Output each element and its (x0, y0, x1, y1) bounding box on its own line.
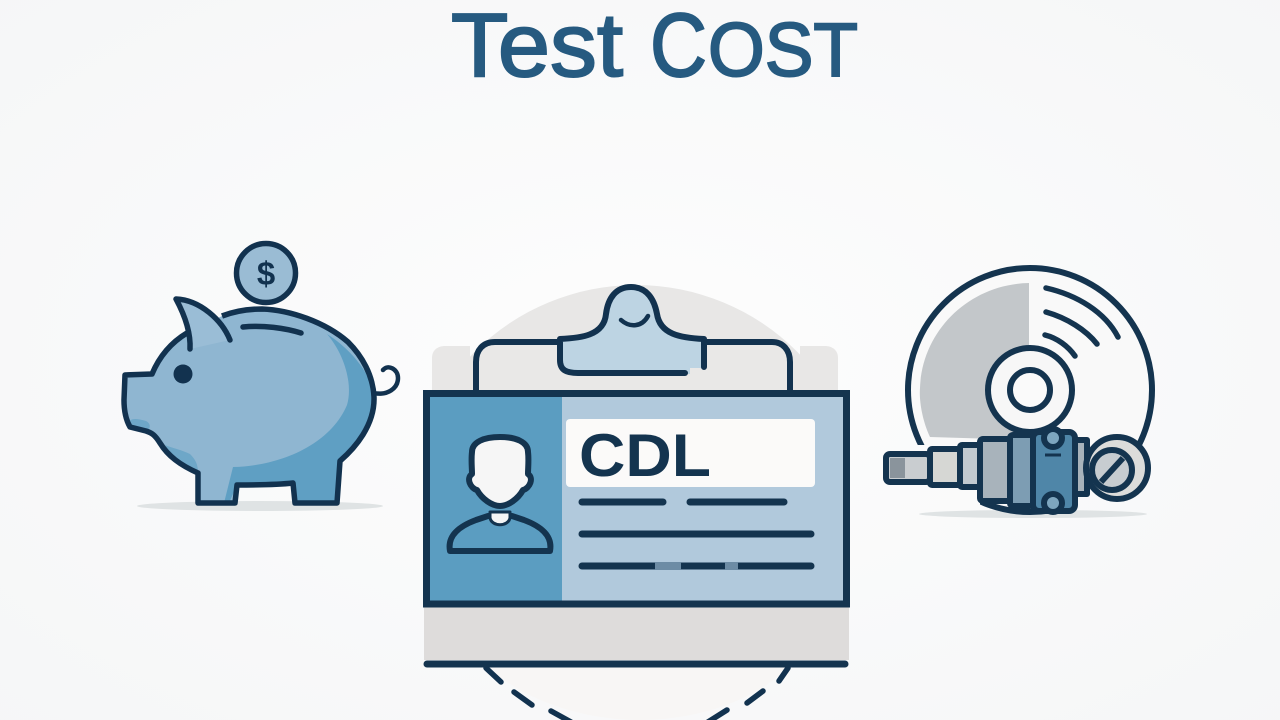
icon: CDL license card on clipboard (408, 285, 864, 720)
card outline (426, 394, 846, 604)
coin: $ (257, 255, 275, 292)
disc hole (1010, 370, 1050, 410)
coin (236, 244, 296, 302)
pig ear (175, 298, 230, 349)
blurred line gaps (655, 562, 738, 570)
pig tail (373, 367, 398, 394)
spark plug (886, 429, 1148, 512)
clipboard back (476, 342, 790, 392)
card text lines (582, 502, 811, 566)
icon: disc with spark plug (886, 268, 1152, 518)
title: OST (708, 8, 858, 93)
plug tip shade (890, 458, 905, 478)
base line (427, 660, 845, 668)
grey dome backdrop (432, 285, 838, 390)
card right panel (427, 394, 846, 604)
plug thread (930, 449, 960, 485)
pig outline (124, 309, 374, 503)
plug collar (960, 445, 980, 487)
CDL label box (566, 419, 815, 487)
plug screw (1092, 450, 1132, 490)
pig shaded belly (224, 334, 374, 503)
plug tip (886, 454, 930, 482)
plug neck (1075, 440, 1087, 494)
plug ring (1086, 437, 1148, 499)
pig cheek shading (128, 419, 198, 473)
pig eye (174, 364, 192, 384)
plug body (1033, 432, 1075, 511)
disc shadow (919, 510, 1147, 518)
coin slot (243, 326, 301, 333)
plug shell (980, 439, 1010, 501)
disc groove arcs (1045, 288, 1118, 356)
disc hub (988, 348, 1072, 432)
card grey base (424, 606, 849, 660)
plug bolts (1044, 429, 1062, 447)
plug band (1010, 435, 1033, 506)
card photo panel (427, 394, 562, 604)
disc (908, 268, 1152, 512)
clipboard clip (560, 287, 706, 374)
title (451, 0, 858, 96)
CDL text: CDL (579, 422, 711, 489)
dashed circle arc (486, 668, 788, 720)
icon: piggy bank (124, 244, 398, 511)
person icon (450, 437, 550, 551)
lower pale circle (486, 666, 790, 720)
disc grey quarter (920, 283, 1029, 440)
pig shadow (137, 501, 383, 511)
pig body (124, 309, 374, 503)
